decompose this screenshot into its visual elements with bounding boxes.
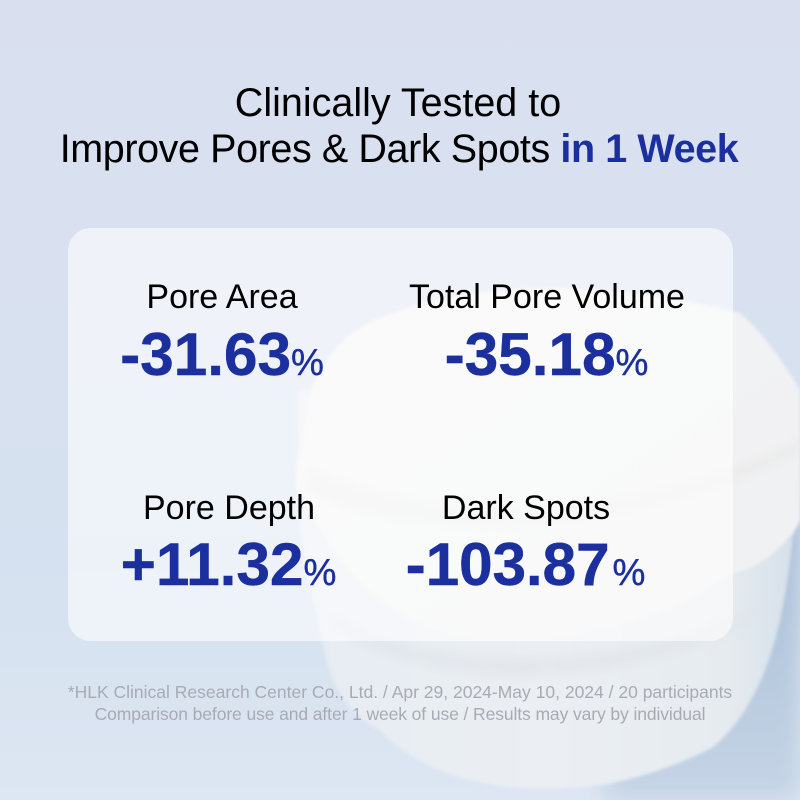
title xyxy=(60,81,739,171)
footnote: Comparison before use and after 1 week of use / Results may vary by individual xyxy=(95,704,705,724)
photo: stacked cotton pads xyxy=(296,288,800,800)
stat: dark spots xyxy=(406,489,645,598)
results panel xyxy=(68,228,733,641)
title: Clinically Tested to xyxy=(235,81,561,125)
stat: pore depth: Pore Depth xyxy=(143,489,315,527)
footnote: *HLK Clinical Research Center Co., Ltd. / Apr 29, 2024-May 10, 2024 / 20 participants xyxy=(68,682,732,702)
stat: pore area: -31.63% xyxy=(120,320,324,388)
stat: pore depth: +11.32% xyxy=(121,530,336,598)
stat: total pore volume xyxy=(409,278,685,388)
title: Improve Pores & Dark Spots in 1 Week xyxy=(60,127,739,171)
stat: pore depth xyxy=(121,489,336,598)
stat: pore area: Pore Area xyxy=(146,278,298,316)
stat: total pore volume: Total Pore Volume xyxy=(409,278,685,316)
stat: pore area xyxy=(120,278,324,388)
footnote xyxy=(68,682,732,724)
stat: dark spots: -103.87% xyxy=(406,530,645,598)
stat: dark spots: Dark Spots xyxy=(442,489,610,527)
stat: total pore volume: -35.18% xyxy=(445,320,648,388)
